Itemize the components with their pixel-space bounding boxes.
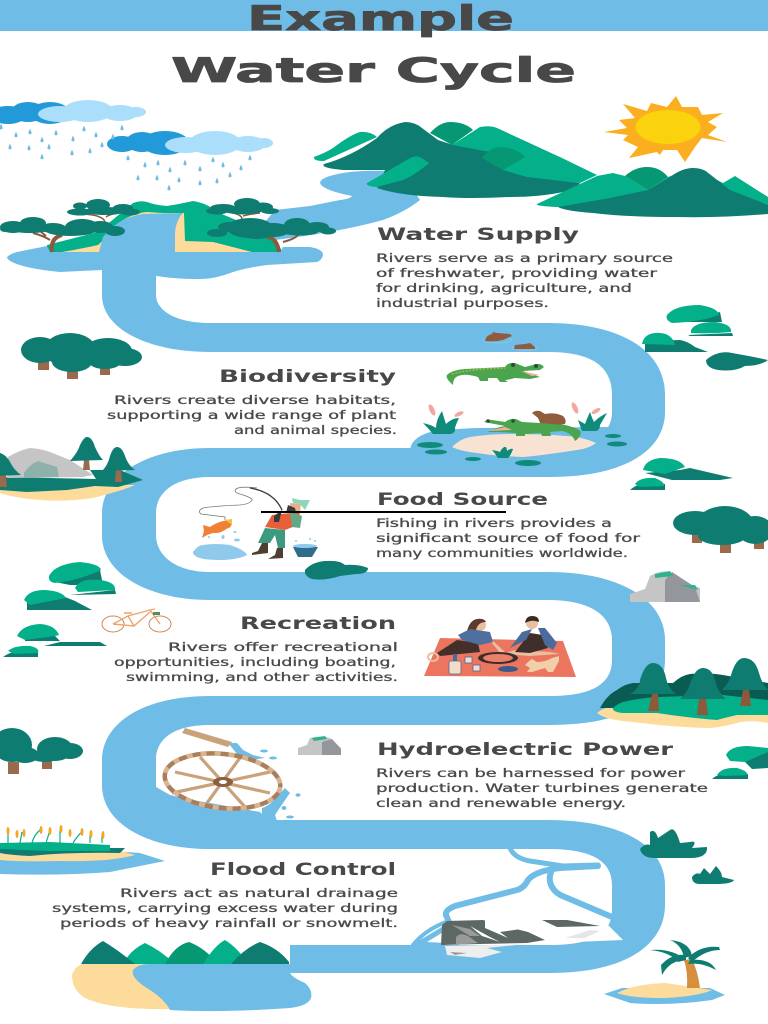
icon: capybaras swimming bbox=[482, 332, 538, 350]
text: water supply: for drinking, agriculture, and bbox=[376, 281, 632, 295]
text: water supply: Rivers serve as a primary source bbox=[376, 251, 673, 265]
icon: crocodile bbox=[447, 363, 544, 385]
text: hydroelectric power: clean and renewable energy. bbox=[376, 796, 626, 810]
icon: palm island bbox=[604, 940, 725, 1004]
icon: delta channels bbox=[413, 848, 612, 945]
text: recreation: swimming, and other activities. bbox=[126, 670, 398, 684]
bushes: right of food source bbox=[630, 458, 733, 490]
icon: rock bbox=[630, 571, 700, 602]
icon: small rock bbox=[298, 736, 341, 755]
icon: rain clouds bbox=[0, 100, 273, 190]
bushes: right of flood control bbox=[640, 829, 734, 884]
title: Example bbox=[247, 0, 514, 39]
text: biodiversity: supporting a wide range of plant bbox=[107, 408, 397, 422]
text: biodiversity: Rivers create diverse habitats, bbox=[114, 393, 396, 407]
text: recreation: Rivers offer recreational bbox=[168, 640, 398, 654]
upper river bbox=[250, 171, 420, 240]
text: food source bbox=[376, 516, 640, 560]
bush on river bank bbox=[305, 561, 368, 580]
heading: flood control: Flood Control bbox=[210, 860, 396, 879]
heading: recreation: Recreation bbox=[240, 614, 396, 633]
heading: biodiversity: Biodiversity bbox=[219, 367, 396, 386]
mountains: right range bbox=[537, 167, 768, 217]
title: Water Cycle bbox=[171, 51, 576, 91]
text: recreation bbox=[114, 640, 398, 684]
icon: island with reeds, crocodile and capybara bbox=[417, 402, 627, 466]
title bbox=[171, 0, 576, 91]
text: recreation: opportunities, including boating, bbox=[114, 655, 396, 669]
bushes: top right bbox=[642, 305, 768, 370]
divider line across food source bbox=[261, 511, 506, 513]
heading: hydroelectric power: Hydroelectric Power bbox=[377, 740, 674, 759]
text: hydroelectric power: Rivers can be harnessed for power bbox=[376, 766, 685, 780]
icon: pine tree island bbox=[597, 658, 768, 728]
text: food source: Fishing in rivers provides a bbox=[376, 516, 612, 530]
icon: reed island bbox=[0, 825, 165, 875]
text: food source: significant source of food for bbox=[376, 531, 640, 545]
heading: water supply: Water Supply bbox=[377, 225, 579, 244]
source lake with green island bbox=[7, 201, 323, 279]
bushes: right of hydroelectric bbox=[712, 746, 768, 779]
text: hydroelectric power: production. Water turbines generate bbox=[376, 781, 708, 795]
icon: bicycle bbox=[102, 609, 171, 632]
text: biodiversity bbox=[107, 393, 397, 437]
text: water supply: of freshwater, providing water bbox=[376, 266, 658, 280]
icon: rocky shore island bbox=[0, 437, 143, 501]
text: water supply: industrial purposes. bbox=[376, 296, 549, 310]
text: flood control: systems, carrying excess water during bbox=[52, 901, 398, 915]
heading: food source: Food Source bbox=[377, 490, 548, 509]
mountains: central range bbox=[314, 122, 597, 198]
icon: waterfall rocks bbox=[412, 919, 623, 958]
icon: trees left of biodiversity bbox=[21, 333, 142, 379]
river: main winding channel bbox=[102, 262, 665, 973]
text: biodiversity: and animal species. bbox=[234, 423, 397, 437]
text: hydroelectric power bbox=[376, 766, 708, 810]
icon: picnic bbox=[424, 616, 576, 677]
header bar bbox=[0, 0, 768, 31]
pond bbox=[410, 427, 625, 477]
icon: bottom-left hills and bay bbox=[72, 940, 311, 1011]
text: food source: many communities worldwide. bbox=[376, 546, 628, 560]
text: water supply bbox=[376, 251, 673, 310]
icon: water wheel bbox=[156, 728, 300, 824]
bushes: left of recreation bbox=[3, 562, 116, 657]
text: flood control: periods of heavy rainfall or snowmelt. bbox=[60, 916, 398, 930]
text: flood control bbox=[52, 886, 398, 930]
icon: fisherman bbox=[193, 487, 318, 560]
icon: sun bbox=[604, 96, 727, 162]
text: flood control: Rivers act as natural drainage bbox=[120, 886, 398, 900]
trees around the lake bbox=[0, 198, 336, 252]
icon: trees right of food source bbox=[673, 506, 768, 553]
icon: trees left of hydroelectric bbox=[0, 728, 83, 774]
